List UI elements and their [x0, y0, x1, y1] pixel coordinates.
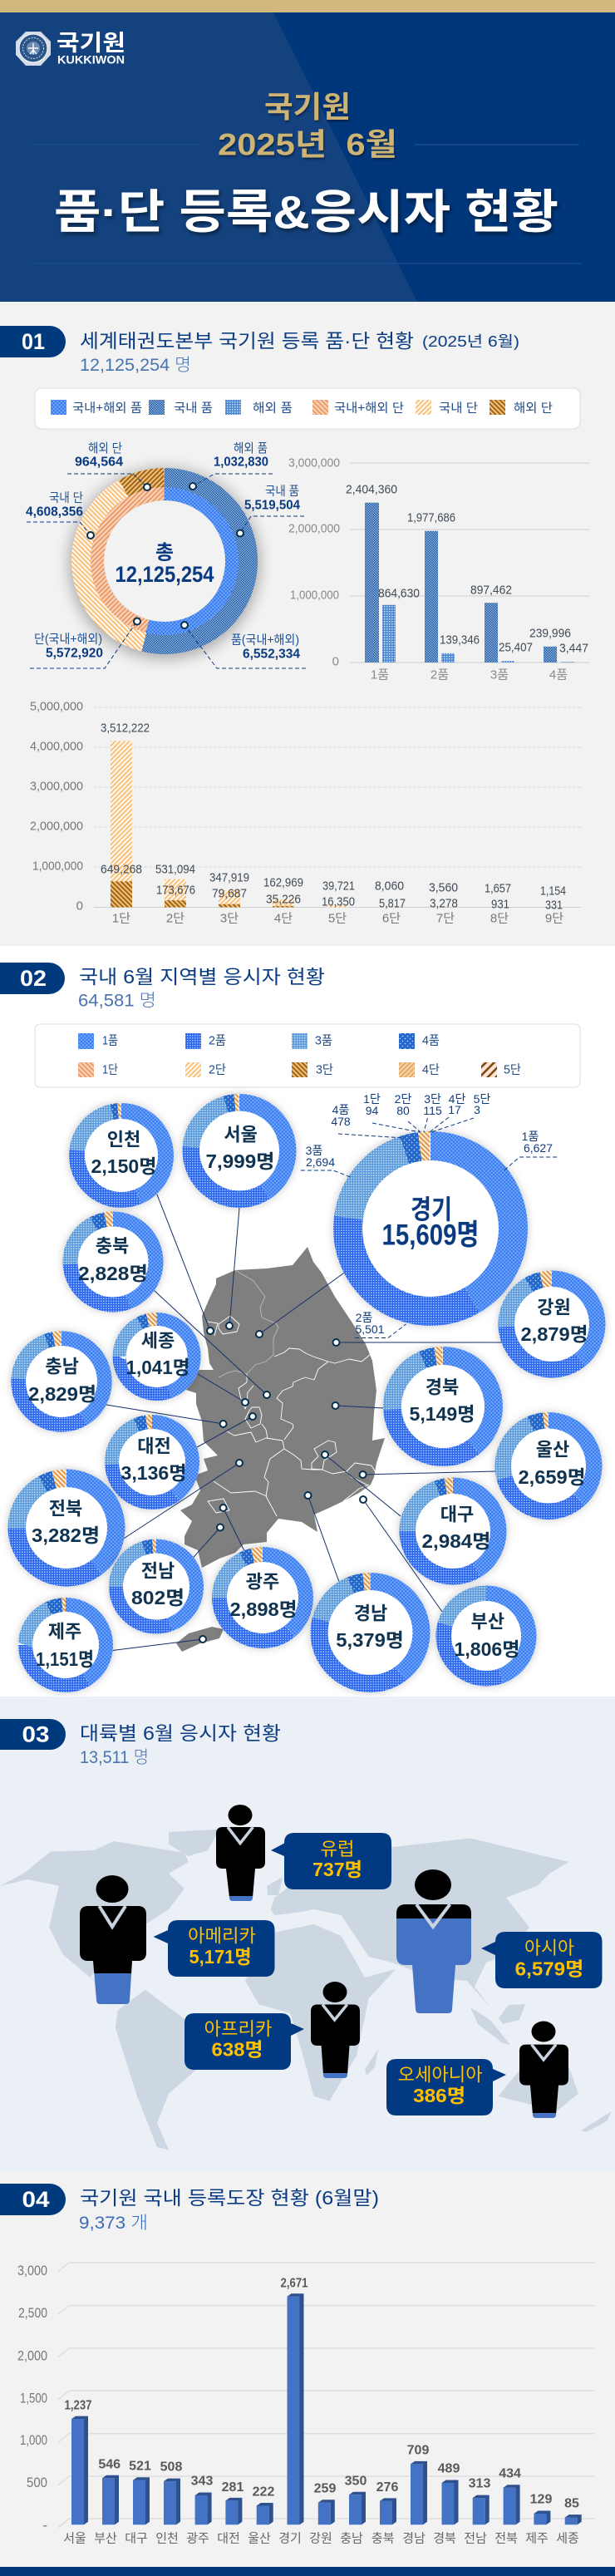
- callout: 국내 품: 5,519,504: [244, 499, 300, 512]
- section 4 heading: 9,373 개: [79, 2214, 148, 2233]
- region labels: 인천: [155, 2532, 179, 2545]
- world map: [0, 1830, 612, 2150]
- donut: 대전: [105, 1415, 199, 1510]
- donut center total: [115, 542, 214, 587]
- annotations: 경기 breakdown: 2품: [356, 1311, 372, 1324]
- value labels: 276: [376, 2480, 398, 2495]
- region labels: 서울: [63, 2532, 86, 2545]
- callout: 단(국내+해외): 5,572,920: [46, 647, 103, 660]
- bar chart: 1품-4품: 897,462: [470, 584, 512, 597]
- legend: section 1: 해외 품: [253, 401, 293, 416]
- donut: 대전: 3,136명: [121, 1462, 186, 1484]
- bar chart: 1단-9단: 173,676: [156, 883, 195, 898]
- bar chart: 1단-9단: 8,060: [375, 879, 404, 893]
- value labels: 343: [191, 2474, 213, 2489]
- bar chart: 1단-9단: 8단: [490, 911, 509, 926]
- bar: 강원: [318, 2500, 335, 2524]
- value labels: 489: [438, 2462, 460, 2475]
- 3D bar chart: domestic dojang: 3,000: [17, 2263, 47, 2278]
- legend: section 2: 3단: [316, 1062, 333, 1077]
- annotations: 경기 breakdown: 3품: [306, 1144, 322, 1157]
- bar: 인천: [164, 2479, 180, 2524]
- value labels: 2,671: [281, 2276, 308, 2291]
- donut: 제주: 1,151명: [36, 1648, 94, 1670]
- donut: 서울: 서울: [224, 1124, 258, 1145]
- donut: 강원: 강원: [537, 1297, 571, 1318]
- bar chart: 1품-4품: [288, 456, 589, 682]
- region labels: 강원: [309, 2532, 332, 2545]
- annotations: 경기 breakdown: 1품: [522, 1130, 539, 1143]
- donut: 광주: 광주: [246, 1571, 279, 1593]
- section 4 heading: [0, 2184, 379, 2233]
- donut: 울산: 울산: [536, 1440, 569, 1460]
- annotations: 경기 breakdown: [301, 1092, 557, 1338]
- callout: 해외 품: [189, 441, 273, 490]
- region labels: 전남: [464, 2532, 487, 2545]
- section 4 background: [0, 2172, 615, 2567]
- donut: 인천: 인천: [107, 1129, 140, 1150]
- annotations: 경기 breakdown: 478: [331, 1115, 351, 1128]
- bar chart: 1단-9단: 3,560: [429, 881, 458, 894]
- header banner: [0, 12, 615, 302]
- bar chart: 1단-9단: [30, 700, 581, 926]
- callout: 아시아: 6,579명: [515, 1958, 583, 1980]
- annotations: 경기 breakdown: 2,694: [306, 1155, 335, 1169]
- bar chart: 1단-9단: 1,154: [540, 884, 566, 898]
- section 4 heading: 04: [22, 2187, 50, 2212]
- region labels: 전북: [494, 2532, 518, 2545]
- donut: 울산: [495, 1412, 602, 1519]
- value labels: 222: [253, 2485, 274, 2499]
- donut: 충남: 충남: [45, 1357, 79, 1377]
- annotations: 경기 breakdown: 115: [423, 1104, 442, 1117]
- person: 아프리카: [311, 1982, 360, 2078]
- person: 아메리카: [80, 1875, 146, 2004]
- region labels: 충남: [340, 2532, 363, 2545]
- callout: 품(국내+해외): [181, 622, 306, 668]
- annotations: 경기 breakdown: 1단: [363, 1092, 381, 1106]
- 3D bar chart: domestic dojang: 500: [27, 2475, 47, 2490]
- bar chart: 1단-9단: 5단: [328, 911, 347, 926]
- map location dots: [199, 1322, 367, 1643]
- legend: section 2: [35, 1024, 580, 1087]
- bar chart: 1품-4품: 2,404,360: [346, 482, 397, 497]
- donut: 제주: [18, 1598, 113, 1692]
- logo: Kukkiwon: [16, 31, 125, 66]
- legend: section 2: 1단: [102, 1062, 118, 1077]
- annotations: 경기 breakdown: 6,627: [524, 1141, 553, 1155]
- bar chart: 1품-4품: 864,630: [378, 587, 420, 600]
- bar chart: 1단-9단: 2단: [166, 911, 184, 926]
- donut: 경남: 5,379명: [336, 1629, 404, 1651]
- bar: 경북: [442, 2480, 459, 2524]
- region labels: 경남: [402, 2532, 426, 2545]
- bar chart: 1품-4품: 25,407: [499, 640, 533, 655]
- donut center total: 12,125,254: [115, 562, 214, 587]
- section 3 heading: [0, 1719, 281, 1767]
- region labels: 세종: [556, 2532, 579, 2545]
- logo: Kukkiwon: 국기원: [57, 31, 125, 56]
- value labels: 129: [530, 2492, 552, 2507]
- legend: section 2: 2단: [209, 1062, 226, 1077]
- donut: 전남: 전남: [141, 1561, 175, 1581]
- donut: 경기: [333, 1131, 528, 1326]
- legend: section 1: 해외 단: [514, 401, 553, 416]
- annotations: 경기 breakdown: 4단: [449, 1092, 465, 1106]
- bar chart: 1품-4품: 3,000,000: [288, 456, 340, 470]
- callout: 아프리카: [184, 2013, 304, 2070]
- callout: 오세아니아: 386명: [413, 2085, 465, 2106]
- donut: 대구: 2,984명: [422, 1530, 490, 1552]
- value labels: 546: [98, 2457, 121, 2472]
- bar chart: 1단-9단: 162,969: [263, 876, 303, 889]
- bar chart: 1단-9단: 79,687: [212, 886, 247, 901]
- person: 유럽: [216, 1805, 265, 1901]
- region labels: 충북: [371, 2532, 395, 2545]
- donut: 경북: [383, 1347, 503, 1466]
- region labels: 대전: [217, 2532, 240, 2545]
- section 4 heading: 국기원 국내 등록도장 현황 (6월말): [80, 2187, 379, 2209]
- bar chart: 1단-9단: 347,919: [209, 871, 249, 884]
- donut: 경북: 5,149명: [409, 1403, 475, 1425]
- bar: 울산: [257, 2503, 273, 2524]
- donut: 세종: 1,041명: [126, 1357, 189, 1378]
- annotations: 경기 breakdown: 3단: [424, 1092, 441, 1106]
- bar: 대구: [133, 2477, 150, 2524]
- donut: 부산: 부산: [470, 1611, 504, 1633]
- donut: 서울: 7,999명: [206, 1150, 274, 1172]
- callout: 품(국내+해외): 6,552,334: [243, 647, 300, 662]
- value labels: 521: [129, 2459, 151, 2474]
- value labels: 281: [222, 2480, 244, 2495]
- bar chart: 1품-4품: 139,346: [440, 633, 480, 647]
- bar: 경남: [411, 2461, 427, 2524]
- region labels: 경북: [433, 2532, 456, 2545]
- 3D bar chart: domestic dojang: [17, 2263, 594, 2545]
- section 2 heading: [0, 963, 325, 1011]
- bar chart: 1품-4품: 4품: [549, 668, 568, 682]
- callout: 유럽: 737명: [312, 1859, 362, 1880]
- donut: 전남: 802명: [131, 1587, 184, 1608]
- bar chart: 1단-9단: 3,000,000: [30, 780, 83, 793]
- bar: 부산: [102, 2475, 119, 2524]
- annotations: 경기 breakdown: 4품: [332, 1103, 349, 1116]
- bar chart: 1단-9단: 35,226: [266, 893, 301, 906]
- annotations: 경기 breakdown: 17: [448, 1103, 461, 1116]
- person: 오세아니아: [519, 2022, 568, 2118]
- bottom navy bar: [0, 2567, 615, 2576]
- donut center total: 총: [155, 542, 174, 564]
- donut: 인천: 2,150명: [91, 1155, 156, 1177]
- callout: 해외 단: 964,564: [75, 456, 123, 469]
- donut: 광주: [212, 1547, 313, 1648]
- section 2 background: [0, 946, 615, 1697]
- bar chart: 1품-4품: 2품: [430, 668, 449, 682]
- value labels: 434: [499, 2467, 521, 2480]
- 3D bar chart: domestic dojang: 1,000: [20, 2432, 47, 2448]
- bar chart: 1단-9단: 0: [76, 899, 83, 913]
- value labels: 1,237: [65, 2399, 92, 2412]
- callout: 아메리카: [153, 1920, 274, 1977]
- donut: 강원: [499, 1270, 605, 1378]
- donut: 충남: [11, 1331, 112, 1432]
- callout: 오세아니아: [386, 2059, 506, 2115]
- donut: 충북: 충북: [96, 1235, 129, 1257]
- title: main: 품·단 등록&응시자 현황: [54, 186, 558, 238]
- annotations: 경기 breakdown: 94: [366, 1104, 378, 1117]
- donut: 경남: [311, 1573, 430, 1692]
- donut: 서울: [183, 1094, 296, 1208]
- section 3 background: [0, 1697, 615, 2172]
- 3D bar chart: domestic dojang: 1,500: [20, 2391, 47, 2406]
- legend: section 1: [35, 388, 580, 429]
- bar chart: 1단-9단: 16,350: [322, 894, 355, 909]
- leader lines from donuts to map: [106, 1194, 502, 1651]
- bar: 충북: [380, 2498, 396, 2524]
- donut: 부산: 1,806명: [454, 1638, 520, 1660]
- callout: 단(국내+해외): 단(국내+해외): [34, 632, 102, 647]
- callout: 아메리카: 아메리카: [188, 1925, 256, 1947]
- legend: section 2: 2품: [209, 1034, 226, 1047]
- callout: 유럽: [271, 1833, 391, 1889]
- callout: 아시아: 아시아: [524, 1938, 574, 1958]
- callout: 아프리카: 아프리카: [204, 2018, 273, 2040]
- legend: section 1: 국내+해외 단: [334, 401, 404, 416]
- donut: 광주: 2,898명: [229, 1598, 298, 1620]
- section 1 heading: 01: [22, 329, 45, 354]
- bar chart: 1단-9단: 9단: [545, 911, 563, 926]
- legend: section 2: 3품: [315, 1034, 332, 1047]
- bar chart: 1단-9단: 3,278: [430, 896, 458, 911]
- callout: 오세아니아: 오세아니아: [398, 2065, 483, 2085]
- section 2 heading: 02: [20, 966, 47, 991]
- bar chart: 1품-4품: 1,977,686: [407, 510, 455, 525]
- callout: 국내 품: [237, 484, 304, 537]
- legend: section 2: 4품: [422, 1034, 440, 1047]
- callout: 유럽: 유럽: [321, 1839, 354, 1859]
- donut: 전남: [109, 1539, 204, 1634]
- donut: 충남: 2,829명: [28, 1383, 96, 1405]
- section 1 heading: 12,125,254 명: [80, 356, 191, 375]
- donut: 경기: 15,609명: [382, 1219, 479, 1252]
- bar chart: 1단-9단: 1,657: [485, 881, 511, 896]
- region labels: 울산: [248, 2532, 271, 2545]
- section 1 heading: 세계태권도본부 국기원 등록 품·단 현황: [80, 330, 414, 352]
- bar: 제주: [534, 2510, 550, 2524]
- callout: 국내 단: 4,608,356: [26, 505, 83, 519]
- map of South Korea: [176, 1247, 385, 1652]
- donut: 울산: 2,659명: [519, 1466, 585, 1488]
- bar chart: 1품-4품: 1,000,000: [290, 589, 339, 602]
- donut: 대구: 대구: [440, 1505, 474, 1524]
- section 3 heading: 03: [22, 1722, 50, 1747]
- donut: 전북: 전북: [49, 1498, 82, 1519]
- region labels: 경기: [278, 2532, 302, 2545]
- top gold bar: [0, 0, 615, 12]
- bar: 대전: [225, 2498, 242, 2524]
- 3D bar chart: domestic dojang: -: [42, 2517, 47, 2534]
- value labels: 85: [564, 2497, 579, 2510]
- bar chart: 1단-9단: 3단: [220, 911, 239, 926]
- section 1 heading: [0, 326, 519, 375]
- callout: 해외 품: 해외 품: [234, 441, 268, 456]
- legend: section 2: 4단: [422, 1062, 440, 1077]
- logo: Kukkiwon: KUKKIWON: [57, 53, 125, 66]
- callout: 국내 단: [26, 490, 94, 539]
- donut chart: total 품 and 단: [26, 441, 306, 668]
- value labels: 259: [314, 2482, 336, 2495]
- title: 국기원: 국기원: [264, 90, 351, 124]
- callout: 해외 단: 해외 단: [88, 441, 122, 456]
- region labels: [63, 2532, 579, 2545]
- donut: 대구: [399, 1478, 507, 1584]
- callout: 국내 단: 국내 단: [49, 490, 83, 505]
- callout: 국내 품: 국내 품: [265, 484, 299, 499]
- person: 아시아: [396, 1869, 471, 2013]
- bar: 경기: [288, 2293, 304, 2524]
- bar: 충남: [349, 2492, 366, 2524]
- bar: 전북: [504, 2485, 520, 2524]
- bar: 광주: [195, 2492, 212, 2524]
- section 2 heading: 국내 6월 지역별 응시자 현황: [79, 966, 325, 988]
- bar chart: 1품-4품: 3,447: [559, 642, 588, 655]
- donut: 충북: 2,828명: [78, 1263, 148, 1284]
- section 2 heading: 64,581 명: [78, 991, 156, 1011]
- callout: 해외 단: [67, 441, 150, 490]
- bar chart: 1단-9단: 4,000,000: [30, 740, 83, 753]
- callout: 아시아: [481, 1932, 602, 1988]
- bar chart: 1단-9단: 3,512,222: [101, 722, 150, 735]
- legend: section 2: 5단: [504, 1062, 521, 1077]
- section 1 heading: (2025년 6월): [422, 333, 519, 350]
- 3D bar chart: domestic dojang: 2,500: [18, 2305, 47, 2321]
- legend: section 1: 국내 품: [174, 401, 213, 416]
- region labels: 부산: [94, 2532, 117, 2545]
- bar chart: 1단-9단: 1,000,000: [32, 859, 83, 873]
- bar: 서울: [71, 2416, 88, 2524]
- value labels: [65, 2276, 579, 2510]
- donut: 전북: [8, 1470, 125, 1586]
- bar chart: 1단-9단: 5,000,000: [30, 700, 83, 713]
- bar chart: 1단-9단: 6단: [382, 911, 401, 926]
- section 3 heading: 대륙별 6월 응시자 현황: [80, 1722, 281, 1744]
- bar chart: 1품-4품: 239,996: [529, 627, 571, 640]
- donut: 부산: [435, 1586, 537, 1686]
- title: 2025년 6월: 2025년 6월: [218, 128, 397, 161]
- donut: 세종: [113, 1313, 201, 1401]
- donut: 세종: 세종: [141, 1330, 175, 1352]
- annotations: 경기 breakdown: 5,501: [355, 1322, 385, 1336]
- donut: 대전: 대전: [137, 1436, 171, 1456]
- donut: 전북: 3,282명: [32, 1524, 100, 1546]
- section 1 background: [0, 302, 615, 946]
- bar chart: 1단-9단: 4단: [274, 911, 293, 926]
- region labels: 제주: [525, 2532, 549, 2545]
- value labels: 350: [345, 2474, 367, 2489]
- bar chart: 1단-9단: 649,268: [101, 863, 142, 876]
- donut: 경북: 경북: [426, 1377, 459, 1398]
- donut: 강원: 2,879명: [520, 1323, 588, 1345]
- bar chart: 1품-4품: 0: [332, 655, 339, 668]
- 3D bar chart: domestic dojang: 2,000: [17, 2347, 47, 2364]
- callout: 아프리카: 638명: [211, 2039, 263, 2061]
- callout: 아메리카: 5,171명: [189, 1946, 251, 1968]
- donut: 경남: 경남: [354, 1603, 387, 1624]
- callout: 품(국내+해외): 품(국내+해외): [231, 633, 299, 647]
- annotations: 경기 breakdown: 2단: [395, 1092, 411, 1106]
- bar chart: 1품-4품: 3품: [490, 668, 509, 682]
- callout: 단(국내+해외): [30, 618, 140, 668]
- donut: 충북: [63, 1212, 163, 1312]
- value labels: 508: [160, 2460, 182, 2474]
- donut: 인천: [69, 1103, 174, 1208]
- legend: section 2: 1품: [102, 1034, 118, 1047]
- bar chart: 1단-9단: 39,721: [322, 879, 355, 893]
- bar: 세종: [565, 2514, 582, 2524]
- legend: section 1: 국내+해외 품: [72, 401, 142, 416]
- bar chart: 1단-9단: 331: [545, 898, 563, 913]
- annotations: 경기 breakdown: 80: [396, 1104, 410, 1117]
- value labels: 313: [469, 2477, 490, 2490]
- bar chart: 1단-9단: 5,817: [379, 896, 406, 911]
- legend: section 1: 국내 단: [439, 401, 478, 416]
- region labels: 광주: [186, 2532, 209, 2545]
- annotations: 경기 breakdown: 5단: [474, 1092, 490, 1106]
- donut: 제주: 제주: [48, 1621, 81, 1643]
- annotations: 경기 breakdown: 3: [474, 1103, 480, 1116]
- value labels: 709: [407, 2444, 429, 2457]
- bar: 전남: [473, 2495, 490, 2524]
- bar chart: 1단-9단: 531,094: [155, 863, 195, 876]
- region labels: 대구: [125, 2532, 148, 2545]
- bar chart: 1품-4품: 1품: [371, 668, 389, 682]
- donut: 경기: 경기: [411, 1194, 452, 1224]
- bar chart: 1단-9단: 7단: [436, 911, 455, 926]
- callout: 해외 품: 1,032,830: [214, 456, 268, 469]
- bar chart: 1단-9단: 931: [491, 898, 509, 911]
- bar chart: 1품-4품: 2,000,000: [288, 522, 340, 535]
- section 3 heading: 13,511 명: [80, 1748, 149, 1767]
- bar chart: 1단-9단: 2,000,000: [30, 820, 83, 833]
- bar chart: 1단-9단: 1단: [112, 911, 130, 926]
